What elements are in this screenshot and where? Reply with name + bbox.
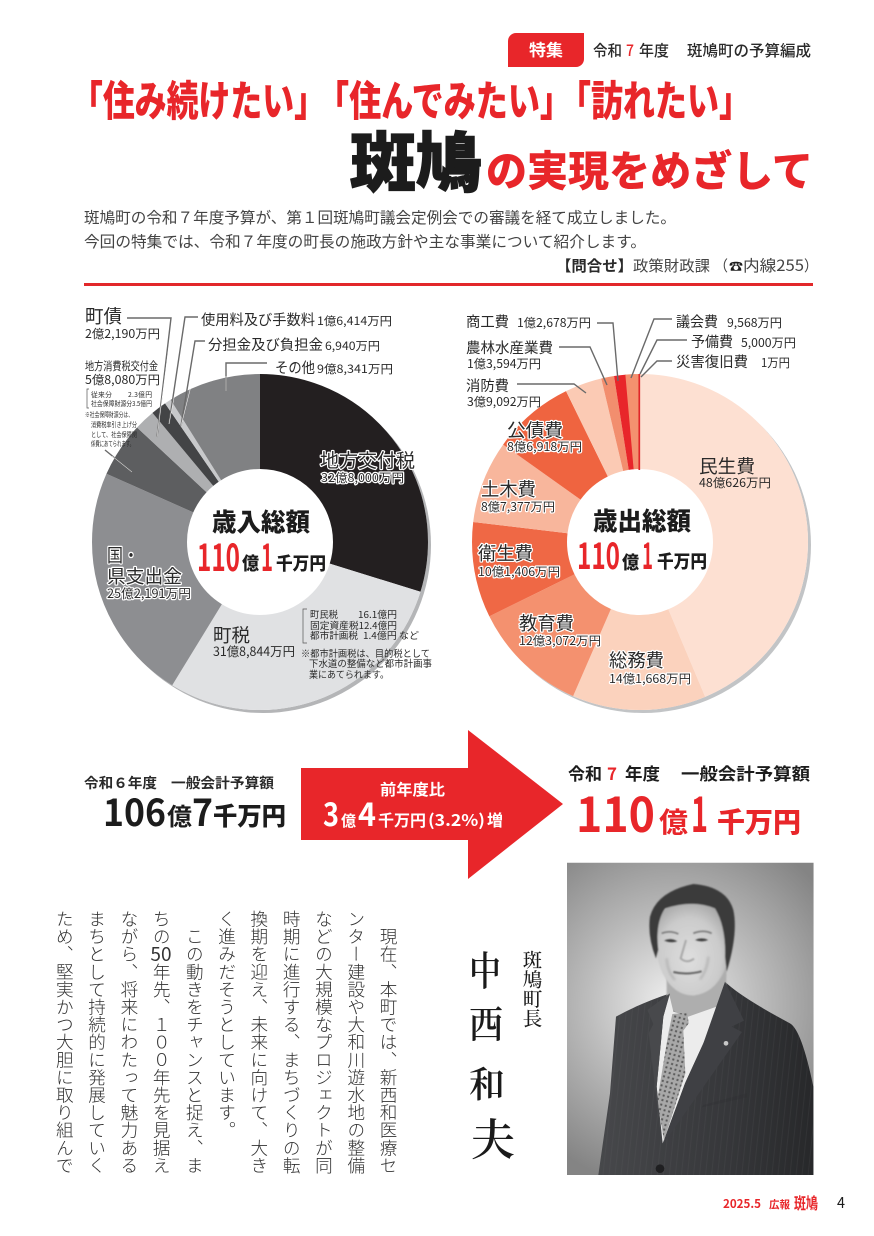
signature: mayor name: 和 <box>469 1057 505 1108</box>
expenditure center total: 1 <box>642 528 653 580</box>
signature: mayor name: 西 <box>469 994 503 1049</box>
article text (vertical): く進みだそうとしています。 <box>215 910 240 1139</box>
header tab: 特集 <box>508 33 584 67</box>
label: 町債: 町債 <box>85 303 122 329</box>
revenue leader lines <box>105 317 267 472</box>
arrow: year-on-year increase: 千万円 <box>378 807 426 831</box>
label: 民生費: 48億626万円 <box>699 474 771 491</box>
expenditure center total: 億 <box>622 549 639 575</box>
title line 2: の実現をめざして <box>486 138 813 199</box>
note: town tax breakdown: 都市計画税 <box>310 628 358 642</box>
label: その他 <box>275 357 393 378</box>
label: 衛生費 <box>478 540 560 580</box>
expenditure center total <box>577 502 707 580</box>
current-year budget: 一般会計予算額 <box>681 760 810 785</box>
label: 使用料及び手数料: 使用料及び手数料 <box>201 309 315 330</box>
page number: 4 <box>837 1192 845 1213</box>
label: 土木費: 土木費 <box>481 476 536 502</box>
label: 町税: 町税 <box>213 622 250 648</box>
label: 分担金及び負担金: 分担金及び負担金 <box>208 334 323 355</box>
article text (vertical): 時期に進行する、まちづくりの転 <box>279 910 304 1174</box>
red rule <box>84 283 813 286</box>
current-year budget: 1 <box>691 776 708 846</box>
contact: 政策財政課 <box>633 255 710 276</box>
note: town tax breakdown: 町民税 <box>310 607 338 621</box>
label: 分担金及び負担金: 6,940万円 <box>325 338 380 354</box>
label: 農林水産業費: 農林水産業費 <box>466 337 553 358</box>
label: 国・県支出金: 国・ <box>107 542 139 568</box>
current-year budget: 7 <box>607 760 617 785</box>
previous-year budget <box>84 773 286 837</box>
label: 教育費: 12億3,072万円 <box>519 632 601 649</box>
label: 災害復旧費 <box>676 351 790 372</box>
label: 総務費: 14億1,668万円 <box>609 670 691 687</box>
signature: mayor name: 斑鳩町長 <box>518 950 546 1028</box>
footer: issue label: 斑鳩 <box>794 1190 818 1214</box>
header caption: 令和 <box>593 39 622 61</box>
header caption: 年度 <box>639 39 669 61</box>
contact: 【問合せ】 <box>556 255 633 276</box>
previous-year budget: 億 <box>167 797 192 832</box>
article text (vertical): この動きをチャンスと捉え、ま <box>182 928 207 1174</box>
label: 商工費 <box>466 311 591 332</box>
article text (vertical): ながら、将来にわたって魅力ある <box>117 910 142 1174</box>
label: 土木費 <box>481 476 555 515</box>
expenditure leader lines <box>517 319 687 393</box>
revenue center total: 億 <box>242 550 259 576</box>
arrow: year-on-year increase: 億 <box>341 810 356 831</box>
note: town tax breakdown: 固定資産税12.4億円 <box>310 618 397 632</box>
title line 1 <box>71 68 751 129</box>
label: 国・県支出金 <box>107 542 191 602</box>
pie chart: expenditure <box>472 374 811 713</box>
label: 商工費: 商工費 <box>466 311 509 332</box>
note: town tax breakdown: 下水道の整備など都市計画事 <box>309 656 432 670</box>
label: 教育費 <box>519 610 601 649</box>
label: 災害復旧費: 1万円 <box>761 354 790 371</box>
label: 災害復旧費: 災害復旧費 <box>676 351 748 372</box>
pie chart: revenue <box>92 374 431 713</box>
label: 使用料及び手数料 <box>201 309 392 330</box>
intro text: 今回の特集では、令和７年度の町長の施政方針や主な事業について紹介します。 <box>84 230 646 252</box>
article text (vertical) <box>52 910 401 1174</box>
header caption: 7 <box>626 39 634 61</box>
label: 地方消費税交付金: 地方消費税交付金 <box>85 358 158 374</box>
header caption: 斑鳩町の予算編成 <box>687 39 811 61</box>
article text (vertical): などの大規模なプロジェクトが同 <box>311 910 336 1174</box>
arrow: year-on-year increase <box>301 730 563 879</box>
intro text <box>84 206 676 252</box>
label: 地方消費税交付金 <box>85 358 160 448</box>
title line 1: 「訪れたい」 <box>559 68 751 129</box>
label: 土木費: 8億7,377万円 <box>481 498 555 515</box>
contact: 内線255 <box>743 254 804 276</box>
article text (vertical): ンター建設や大和川遊水地の整備 <box>344 910 369 1174</box>
current-year budget: 年度 <box>625 760 660 785</box>
label: 消防費: 3億9,092万円 <box>467 393 541 410</box>
note: town tax breakdown: 業にあてられます。 <box>309 667 389 681</box>
expenditure center total: 歳出総額 <box>593 502 691 538</box>
revenue center total: 110 <box>197 528 240 582</box>
title line 2 <box>350 111 813 205</box>
title line 1: 「住み続けたい」 <box>71 68 326 129</box>
revenue center total: 1 <box>261 528 273 582</box>
signature: mayor name <box>469 940 546 1168</box>
label: 商工費: 1億2,678万円 <box>517 314 591 331</box>
article text (vertical): 現在、本町では、新西和医療セ <box>376 928 401 1174</box>
label: 予備費: 5,000万円 <box>741 334 796 351</box>
article text (vertical): まちとして持続的に発展していく <box>85 910 110 1174</box>
note: town tax breakdown <box>301 607 432 681</box>
contact <box>556 254 818 276</box>
revenue center total <box>197 503 326 582</box>
label: 使用料及び手数料: 1億6,414万円 <box>317 313 392 329</box>
current-year budget: 億 <box>659 801 688 841</box>
photo: portrait of the mayor <box>567 863 814 1175</box>
previous-year budget: 106 <box>103 783 166 837</box>
article text (vertical): ため、堅実かつ大胆に取り組んで <box>52 910 77 1174</box>
header caption <box>593 39 811 61</box>
arrow: year-on-year increase: 前年度比 <box>380 778 446 800</box>
label: 予備費: 予備費 <box>691 331 733 352</box>
previous-year budget: 一般会計予算額 <box>171 773 274 793</box>
title line 1: 「住んでみたい」 <box>317 68 572 129</box>
label: 地方消費税交付金: 従来分 2.3億円 <box>91 389 152 399</box>
label: 総務費 <box>609 647 691 687</box>
label: 公債費: 8億6,918万円 <box>507 438 582 455</box>
current-year budget: 令和 <box>568 760 602 785</box>
header tab: 特集: 特集 <box>529 37 564 61</box>
label: 町債 <box>85 303 160 342</box>
footer: issue label: 広報 <box>769 1197 790 1212</box>
expenditure center total: 110 <box>577 528 620 580</box>
title line 2: 斑鳩 <box>350 111 482 205</box>
label: 議会費: 議会費 <box>676 311 718 332</box>
label: 民生費: 民生費 <box>699 453 755 479</box>
current-year budget <box>568 760 810 846</box>
note: town tax breakdown: 1.4億円 など <box>363 628 420 642</box>
label: 国・県支出金: 25億2,191万円 <box>107 583 191 602</box>
label: 地方交付税: 32億8,000万円 <box>321 469 404 486</box>
label: 消防費 <box>466 375 541 410</box>
label: 分担金及び負担金 <box>208 334 380 355</box>
arrow: year-on-year increase: (3.2%) <box>428 807 485 831</box>
label: 衛生費: 10億1,406万円 <box>478 563 560 580</box>
label: 地方交付税 <box>320 446 415 486</box>
contact: ） <box>804 255 818 276</box>
label: 農林水産業費 <box>466 337 553 372</box>
previous-year budget: 千万円 <box>213 797 286 833</box>
label: 国・県支出金: 県支出金 <box>107 563 182 589</box>
signature: mayor name: 夫 <box>471 1104 515 1168</box>
label: 町税: 31億8,844万円 <box>213 641 295 660</box>
expenditure center total: 千万円 <box>657 548 707 574</box>
label: 町税 <box>213 622 295 660</box>
label: 消防費: 消防費 <box>466 375 509 396</box>
label: 地方消費税交付金: 5億8,080万円 <box>85 371 160 388</box>
label: 地方消費税交付金: 社会保障財源分3.5億円 <box>91 398 152 408</box>
arrow: year-on-year increase: 3 <box>323 790 339 836</box>
signature: mayor name: 中 <box>469 940 501 997</box>
label: その他: 9億8,341万円 <box>317 361 393 377</box>
revenue center total: 歳入総額 <box>212 503 310 539</box>
label: 予備費 <box>691 331 796 352</box>
label: 町債: 2億2,190万円 <box>85 325 160 342</box>
previous-year budget: 令和６年度 <box>84 773 157 793</box>
label: 議会費 <box>676 311 782 332</box>
note: town tax breakdown: 16.1億円 <box>358 607 397 621</box>
footer: issue label: 2025.5 <box>723 1195 761 1212</box>
current-year budget: 110 <box>576 776 655 846</box>
label: その他: その他 <box>275 357 315 378</box>
label: 民生費 <box>699 453 771 491</box>
label: 公債費: 公債費 <box>507 417 563 443</box>
contact: ☎ <box>729 256 743 275</box>
label: 議会費: 9,568万円 <box>727 314 782 331</box>
current-year budget: 千万円 <box>717 801 801 841</box>
footer: issue label <box>723 1190 818 1214</box>
revenue center total: 千万円 <box>276 550 326 576</box>
label: 地方消費税交付金: として、社会保障関 <box>91 429 137 439</box>
label: 教育費: 教育費 <box>519 610 574 636</box>
previous-year budget: 7 <box>192 783 213 837</box>
label: 地方消費税交付金: ※社会保障財源分は、 <box>85 409 133 419</box>
note: town tax breakdown: ※都市計画税は、目的税として <box>301 646 430 660</box>
arrow: year-on-year increase: 4 <box>358 790 376 836</box>
contact: （ <box>714 255 728 276</box>
article text (vertical): 換期を迎え、未来に向けて、大き <box>247 910 272 1174</box>
label: 地方交付税: 地方交付税 <box>320 446 415 473</box>
label: 総務費: 総務費 <box>609 647 664 673</box>
arrow: year-on-year increase: 増 <box>487 807 503 831</box>
intro text: 斑鳩町の令和７年度予算が、第１回斑鳩町議会定例会での審議を経て成立しました。 <box>84 206 676 228</box>
label: 地方消費税交付金: 係費にあてられます。 <box>91 438 134 448</box>
label: 農林水産業費: 1億3,594万円 <box>467 355 541 372</box>
label: 衛生費: 衛生費 <box>478 540 533 566</box>
article text (vertical): ちの 年先、１００年先を見据え <box>149 910 174 1174</box>
article text (vertical): 50 <box>150 940 172 967</box>
label: 公債費 <box>507 417 582 455</box>
label: 地方消費税交付金: 消費税率引き上げ分 <box>91 419 137 429</box>
